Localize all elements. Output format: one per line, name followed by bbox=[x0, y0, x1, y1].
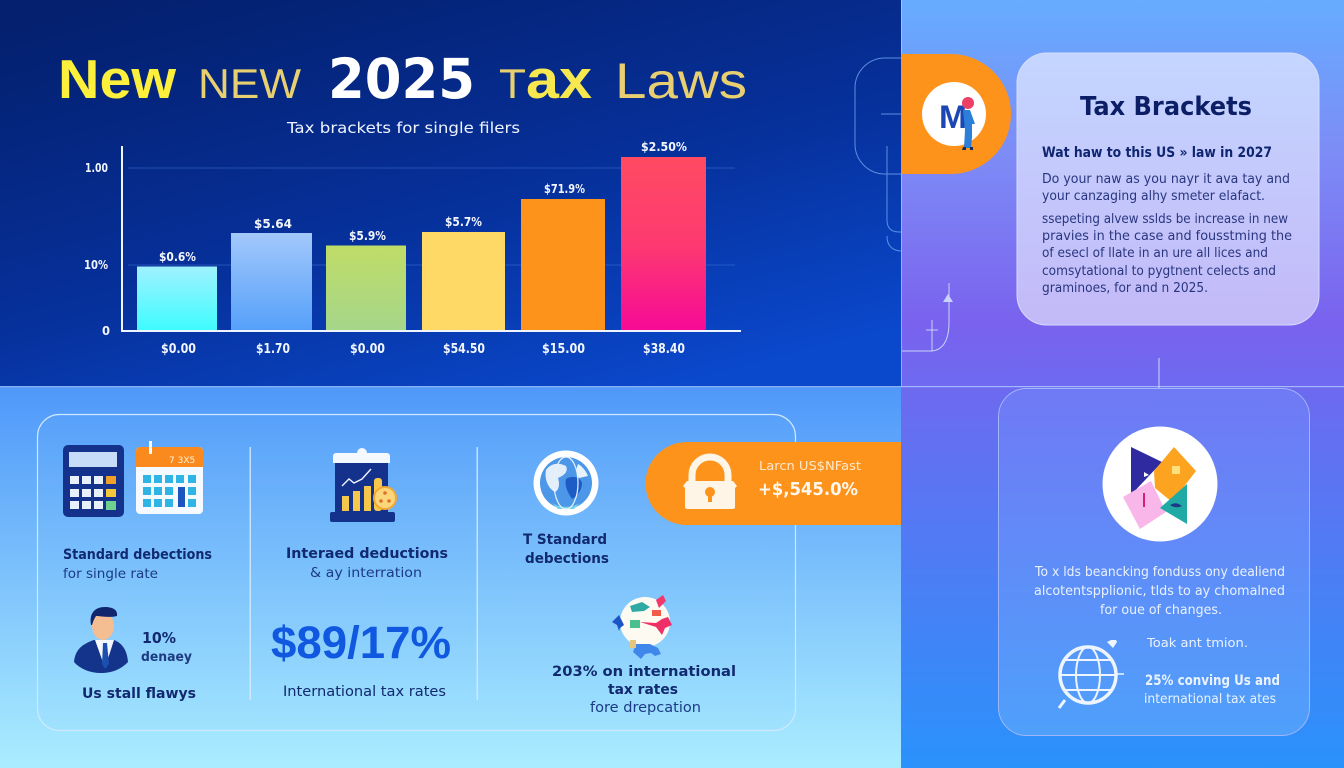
card body text: your canzaging alhy smeter elafact. bbox=[1042, 188, 1265, 204]
panel: tax brackets card bbox=[1017, 53, 1319, 325]
orange badge: person icon: M bbox=[939, 99, 967, 135]
x axis labels: $38.40 bbox=[643, 342, 685, 357]
card body text: graminoes, for and n 2025. bbox=[1042, 280, 1208, 296]
text: international tax rates: International tax rates bbox=[283, 684, 446, 700]
title: NEW bbox=[198, 60, 301, 107]
card body text: of esecl of llate in an ure all lices and bbox=[1042, 245, 1268, 261]
text: international rates column 3: fore drepcation bbox=[590, 700, 701, 716]
x axis labels: $0.00 bbox=[350, 342, 385, 357]
stat text: 25% conving Us and bbox=[1145, 673, 1280, 689]
y axis labels bbox=[84, 160, 110, 338]
icon: outline globe bbox=[1059, 640, 1124, 708]
text: standard deductions column 3 bbox=[523, 532, 609, 567]
card body text: Do your naw as you nayr it ava tay and bbox=[1042, 171, 1290, 187]
title: ax bbox=[526, 48, 592, 110]
card body text bbox=[1042, 171, 1292, 296]
panel: changes card bbox=[998, 388, 1310, 736]
icon: calendar bbox=[136, 441, 203, 514]
stat text: Toak ant tmion. bbox=[1146, 635, 1248, 650]
card body text: ssepeting alvew sslds be increase in new bbox=[1042, 211, 1288, 227]
decorative circuit lines bbox=[855, 58, 1159, 397]
text: standard deductions bbox=[63, 547, 212, 582]
card description: alcotentspplionic, tlds to ay chomalned bbox=[1034, 583, 1285, 599]
value labels: $5.9% bbox=[349, 228, 386, 243]
text: 10% denaey bbox=[141, 629, 192, 665]
text: itemized deductions: & ay interration bbox=[310, 565, 422, 581]
card body text: comsytational to pygtnent celects and bbox=[1042, 263, 1276, 279]
icon: puzzle shapes in circle bbox=[1102, 426, 1218, 542]
bar chart: tax brackets bbox=[84, 139, 741, 357]
icon: calendar: 7 3X5 bbox=[169, 456, 195, 466]
chart axes bbox=[122, 146, 741, 331]
text: standard deductions: for single rate bbox=[63, 566, 158, 582]
text: 10% denaey: 10% bbox=[142, 629, 176, 647]
text: 10% denaey: denaey bbox=[141, 649, 192, 665]
icon: world with flags bbox=[612, 595, 672, 659]
text: itemized deductions: Interaed deductions bbox=[286, 546, 448, 562]
value labels: $71.9% bbox=[544, 181, 585, 196]
orange lock callout bbox=[646, 442, 901, 525]
big stat: $89/17% bbox=[271, 617, 451, 668]
value labels: $5.7% bbox=[445, 214, 482, 229]
stat text bbox=[1144, 635, 1280, 707]
orange badge: person icon bbox=[901, 54, 1011, 174]
bars bbox=[137, 157, 706, 330]
title bbox=[58, 47, 747, 111]
x axis labels bbox=[161, 342, 685, 357]
title: New bbox=[58, 48, 176, 110]
text: standard deductions: Standard debections bbox=[63, 547, 212, 563]
text: itemized deductions bbox=[286, 546, 448, 581]
card subheading: Wat haw to this US » law in 2027 bbox=[1042, 145, 1272, 161]
value labels: $0.6% bbox=[159, 249, 196, 264]
orange lock callout: Larcn US$NFast bbox=[759, 459, 861, 473]
chart subtitle: Tax brackets for single filers bbox=[286, 119, 520, 137]
icon: chart board bbox=[330, 448, 396, 522]
card description: To x lds beancking fonduss ony dealiend bbox=[1034, 564, 1285, 580]
x axis labels: $1.70 bbox=[256, 342, 290, 357]
icon: globe bbox=[534, 450, 598, 516]
orange lock callout: +$,545.0% bbox=[758, 479, 858, 500]
card heading: Tax Brackets bbox=[1080, 92, 1252, 122]
background: right purple-blue panel bbox=[901, 0, 1344, 768]
card description: for oue of changes. bbox=[1100, 602, 1222, 618]
text: international rates column 3 bbox=[552, 664, 736, 716]
x axis labels: $54.50 bbox=[443, 342, 485, 357]
title: 2025 bbox=[328, 47, 475, 111]
title: T bbox=[499, 60, 526, 107]
text: standard deductions column 3: debections bbox=[525, 551, 609, 567]
icon: calculator bbox=[63, 445, 124, 517]
x axis labels: $0.00 bbox=[161, 342, 196, 357]
background: top-left navy panel bbox=[0, 0, 901, 386]
x axis labels: $15.00 bbox=[542, 342, 585, 357]
value labels: $2.50% bbox=[641, 139, 687, 154]
text: international rates column 3: tax rates bbox=[608, 682, 678, 698]
text: standard deductions column 3: T Standard bbox=[523, 532, 607, 548]
card body text: pravies in the case and fousstming the bbox=[1042, 228, 1292, 244]
background: lower-left light blue panel bbox=[0, 387, 901, 768]
panel: deductions outline bbox=[38, 414, 796, 730]
value labels: $5.64 bbox=[254, 216, 292, 231]
text: international rates column 3: 203% on international bbox=[552, 664, 736, 680]
y axis labels: 10% bbox=[84, 257, 108, 272]
value labels bbox=[159, 139, 687, 264]
y axis labels: 1.00 bbox=[85, 160, 108, 175]
text: us stall flawys: Us stall flawys bbox=[82, 686, 196, 702]
icon: padlock bbox=[683, 457, 737, 509]
title: Laws bbox=[615, 53, 747, 109]
card description bbox=[1034, 564, 1285, 618]
stat text: international tax ates bbox=[1144, 691, 1276, 707]
y axis labels: 0 bbox=[102, 323, 110, 338]
icon: businessman bbox=[74, 607, 128, 673]
